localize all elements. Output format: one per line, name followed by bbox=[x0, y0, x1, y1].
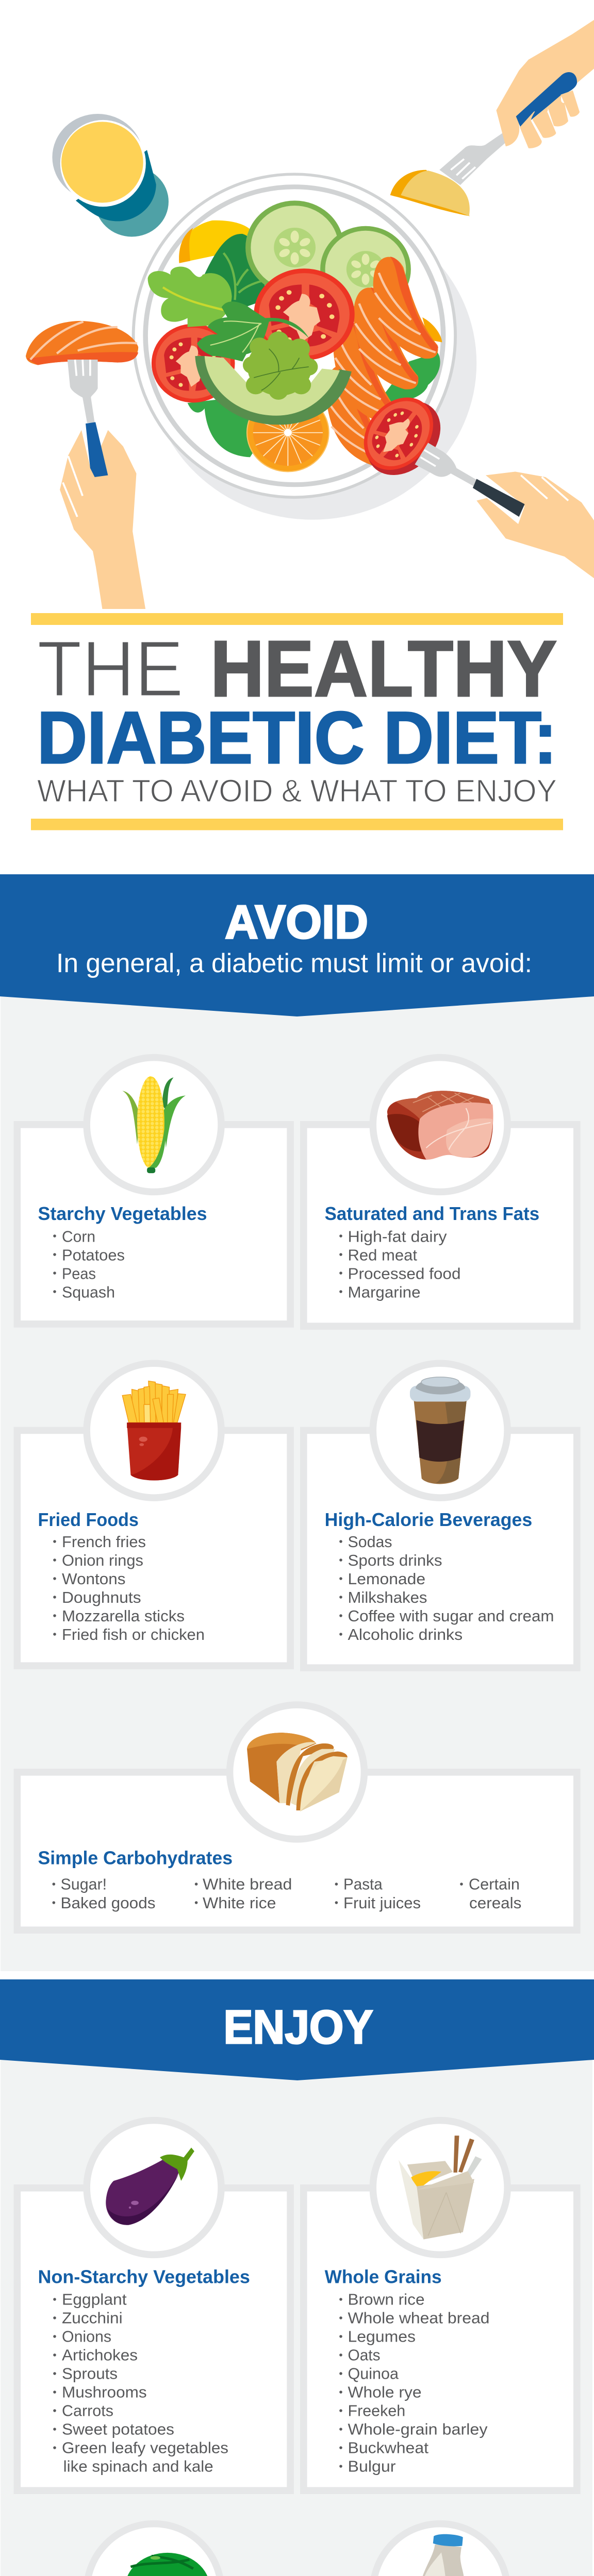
list: Green leafy vegetables bbox=[62, 2439, 228, 2457]
plate bbox=[134, 174, 455, 497]
hand: bottom left bbox=[60, 422, 145, 609]
title line: DIABETIC DIET: DIABETIC DIET: bbox=[37, 697, 557, 779]
heading: Starchy Vegetables bbox=[38, 1203, 207, 1224]
title top rule bbox=[31, 613, 563, 625]
list: Carrots bbox=[62, 2402, 113, 2420]
title bottom rule bbox=[31, 819, 563, 830]
list: Mushrooms bbox=[62, 2383, 147, 2401]
list: Processed food bbox=[348, 1264, 461, 1283]
icon: french fries bbox=[122, 1381, 186, 1480]
avoid subheading: In general, a diabetic must limit or avoid: bbox=[56, 948, 532, 978]
list: Mozzarella sticks bbox=[62, 1607, 185, 1625]
list: Baked goods bbox=[61, 1894, 156, 1912]
icon: eggplant bbox=[106, 2147, 194, 2225]
salad on the plate bbox=[148, 203, 442, 471]
panel: avoid section background bbox=[1, 992, 594, 1971]
list: Fruit juices bbox=[343, 1894, 421, 1912]
juice glass bbox=[52, 114, 169, 236]
icon: watermelon bbox=[98, 2553, 210, 2576]
list: High-fat dairy bbox=[348, 1227, 447, 1246]
list: like spinach and kale bbox=[63, 2458, 213, 2476]
icon: coffee cup bbox=[410, 1377, 470, 1484]
list: Squash bbox=[62, 1283, 115, 1301]
banner: enjoy bbox=[0, 1979, 594, 2080]
list: Legumes bbox=[348, 2328, 416, 2346]
list: Brown rice bbox=[348, 2291, 425, 2309]
panel: starchy vegetables bbox=[17, 1058, 290, 1324]
list: Sweet potatoes bbox=[62, 2420, 174, 2438]
list: White rice bbox=[203, 1894, 276, 1912]
avoid heading: AVOID bbox=[225, 896, 368, 948]
banner: avoid bbox=[0, 874, 594, 1016]
heading: Simple Carbohydrates bbox=[38, 1848, 233, 1868]
list: Coffee with sugar and cream bbox=[348, 1607, 554, 1625]
plate shadow bbox=[148, 207, 476, 520]
list: Doughnuts bbox=[62, 1588, 141, 1606]
list: Freekeh bbox=[348, 2402, 405, 2420]
small tomato slice on fork bbox=[350, 385, 456, 489]
panel: simple carbohydrates bbox=[17, 1705, 577, 1930]
list: Onion rings bbox=[62, 1551, 143, 1569]
list: Red meat bbox=[348, 1246, 417, 1264]
list: French fries bbox=[62, 1533, 146, 1551]
salmon piece on fork bbox=[26, 321, 138, 365]
fork: bottom right bbox=[415, 443, 478, 486]
list: Alcoholic drinks bbox=[348, 1625, 463, 1643]
title line: THE: THE bbox=[37, 624, 184, 713]
list: Lemonade bbox=[348, 1570, 425, 1588]
list: Whole rye bbox=[348, 2383, 422, 2401]
panel: low-fat dairy bbox=[304, 2524, 577, 2576]
enjoy heading: ENJOY bbox=[224, 2001, 373, 2054]
heading: Whole Grains bbox=[325, 2266, 442, 2287]
panel: enjoy section background bbox=[1, 2056, 592, 2576]
list: White bread bbox=[203, 1875, 292, 1893]
panel: high-calorie beverages bbox=[304, 1363, 577, 1668]
list bbox=[339, 1227, 461, 1301]
list: Sports drinks bbox=[348, 1551, 442, 1569]
list bbox=[339, 2291, 490, 2476]
list: Oats bbox=[348, 2346, 381, 2364]
list: Whole wheat bread bbox=[348, 2309, 490, 2327]
list: Margarine bbox=[348, 1283, 421, 1301]
list: Milkshakes bbox=[348, 1588, 427, 1606]
list bbox=[53, 1875, 521, 1912]
icon: milk bottle bbox=[416, 2534, 464, 2576]
list: Bulgur bbox=[348, 2458, 396, 2476]
panel: saturated and trans fats bbox=[304, 1058, 577, 1326]
subtitle: WHAT TO AVOID & WHAT TO ENJOY bbox=[37, 773, 557, 808]
list bbox=[53, 1533, 205, 1643]
list: Fried fish or chicken bbox=[62, 1625, 205, 1643]
icon: corn bbox=[122, 1076, 186, 1173]
list: Artichokes bbox=[62, 2346, 138, 2364]
panel: whole grains bbox=[304, 2121, 577, 2490]
list: Certain bbox=[469, 1875, 520, 1893]
lemon wedge on fork bbox=[390, 170, 470, 216]
list: Quinoa bbox=[348, 2365, 399, 2383]
list: Wontons bbox=[62, 1570, 125, 1588]
panel: fruits bbox=[17, 2524, 290, 2576]
list: Pasta bbox=[343, 1875, 383, 1893]
title block bbox=[31, 613, 563, 830]
list: Buckwheat bbox=[348, 2439, 428, 2457]
icon: ham bbox=[387, 1091, 493, 1160]
icon: bread loaf bbox=[247, 1733, 348, 1811]
list: Sugar! bbox=[61, 1875, 107, 1893]
hand: top right bbox=[496, 20, 594, 148]
title line: HEALTHY: HEALTHY bbox=[210, 624, 557, 713]
list: Onions bbox=[62, 2328, 111, 2346]
icon: noodle box bbox=[399, 2136, 482, 2240]
hand: bottom right bbox=[473, 471, 594, 578]
fork: top right bbox=[439, 131, 509, 185]
list: Zucchini bbox=[62, 2309, 123, 2327]
list: Sodas bbox=[348, 1533, 392, 1551]
list: Sprouts bbox=[62, 2365, 118, 2383]
list: Peas bbox=[62, 1264, 96, 1283]
heading: Saturated and Trans Fats bbox=[325, 1203, 539, 1224]
hero illustration: plate of salad with hands and cutlery bbox=[26, 20, 594, 609]
heading: Non-Starchy Vegetables bbox=[38, 2266, 250, 2287]
list: Corn bbox=[62, 1227, 95, 1246]
list: Eggplant bbox=[62, 2291, 127, 2309]
list: Potatoes bbox=[62, 1246, 125, 1264]
list bbox=[339, 1533, 554, 1643]
heading: Fried Foods bbox=[38, 1509, 139, 1530]
list bbox=[53, 2291, 228, 2476]
panel: non-starchy vegetables bbox=[17, 2121, 290, 2490]
fork: left bbox=[68, 360, 98, 423]
list bbox=[53, 1227, 125, 1301]
list: cereals bbox=[469, 1894, 521, 1912]
panel: fried foods bbox=[17, 1363, 290, 1666]
heading: High-Calorie Beverages bbox=[325, 1509, 532, 1530]
list: Whole-grain barley bbox=[348, 2420, 488, 2438]
